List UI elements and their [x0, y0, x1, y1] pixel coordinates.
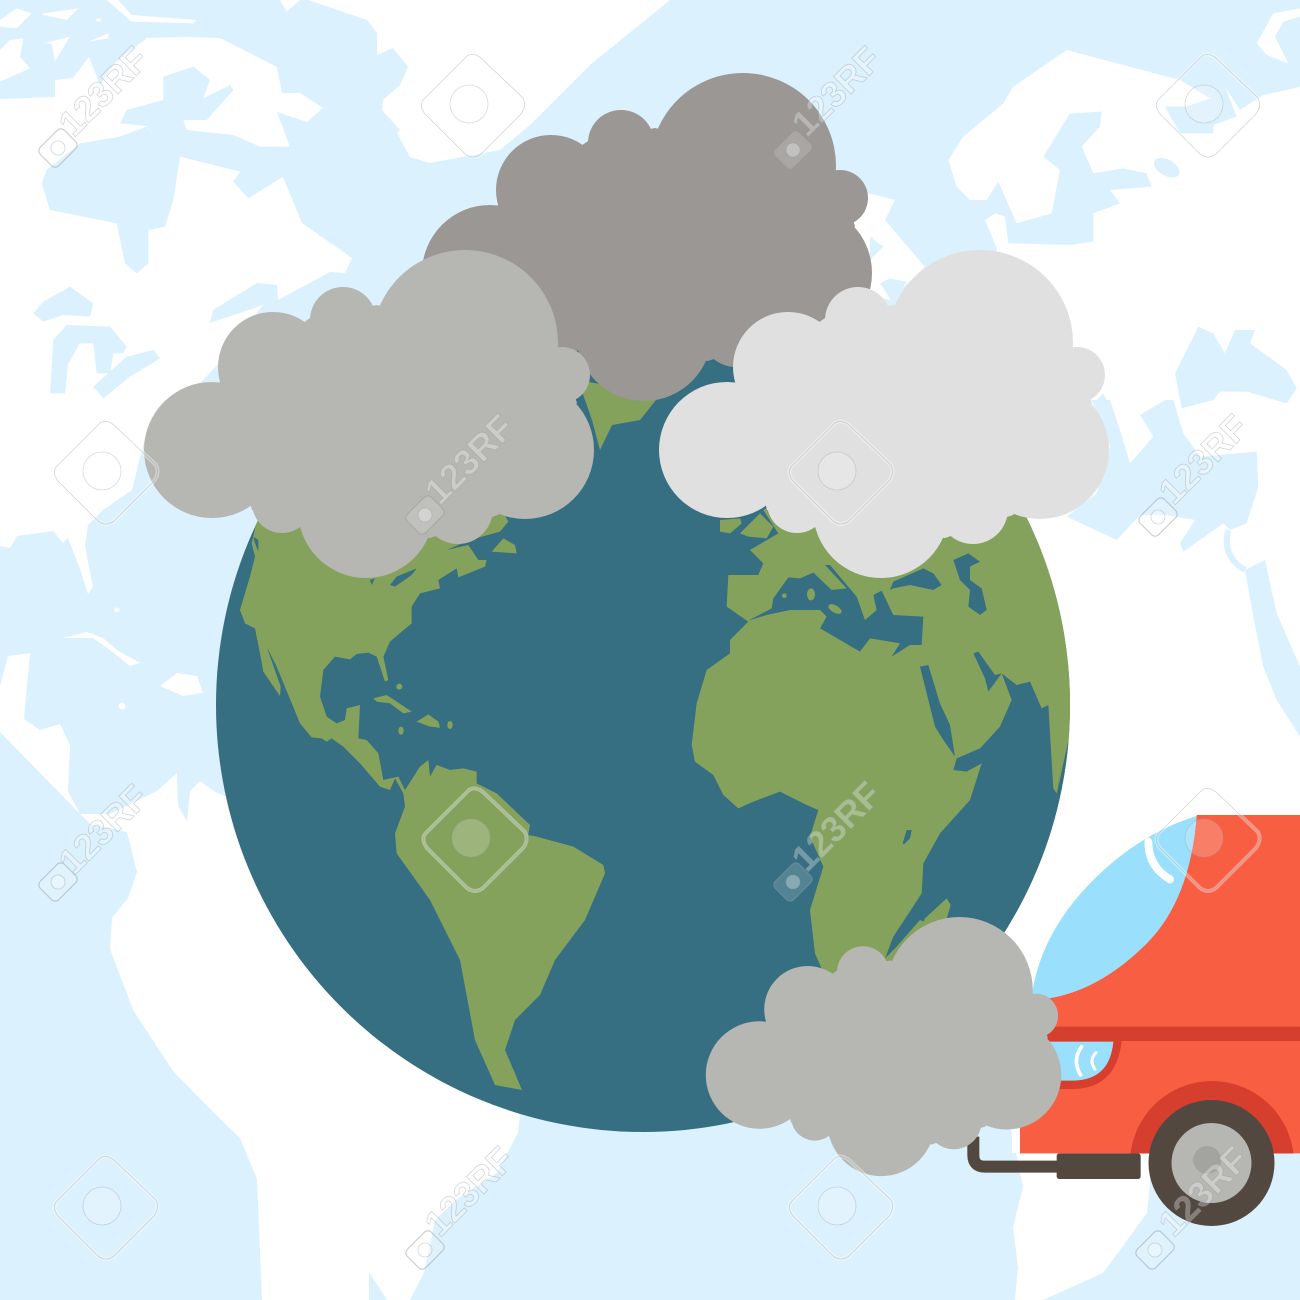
watermark text: 123RF: [1150, 1138, 1256, 1244]
map: arctic islands: [0, 0, 300, 82]
wheel: [1148, 1100, 1274, 1226]
windshield: [1032, 816, 1197, 998]
map: asian seas: [870, 98, 1297, 430]
windshield reflection: [1148, 842, 1170, 879]
land: greenland tip: [582, 382, 656, 450]
cloud: medium left: [144, 250, 594, 578]
watermark text: 123RF: [50, 776, 156, 882]
watermark text: 123RF: [416, 1138, 522, 1244]
cloud: dark top: [422, 73, 872, 401]
globe: [216, 350, 1070, 1132]
land: africa and eurasia: [692, 500, 1097, 980]
map: eurasia and africa: [948, 8, 1300, 1153]
headlight: [1048, 1041, 1122, 1089]
exhaust pipe: [973, 1137, 1060, 1167]
land: americas: [240, 500, 605, 1090]
watermark text: 123RF: [50, 38, 156, 144]
map: greenland: [308, 0, 670, 163]
cloud: exhaust smoke: [706, 917, 1061, 1176]
map: caribbean islands: [63, 632, 140, 666]
watermark text: 123RF: [783, 38, 889, 144]
car body: [1020, 815, 1300, 1153]
car: [973, 815, 1300, 1245]
muffler: [1057, 1153, 1141, 1179]
map: indian ocean side: [1067, 400, 1300, 737]
map: iceland side: [850, 190, 925, 300]
map: south america: [0, 653, 520, 1300]
watermark text: 123RF: [416, 406, 522, 512]
watermark text: 123RF: [783, 773, 889, 879]
watermark text: 123RF: [1150, 406, 1256, 512]
map: hudson bay: [33, 67, 300, 398]
cloud: light right: [659, 250, 1109, 578]
map: north america top left: [0, 37, 352, 594]
hood line: [1047, 1027, 1300, 1041]
wheel arch: [1130, 1081, 1294, 1154]
map: southern africa: [1012, 1133, 1150, 1300]
